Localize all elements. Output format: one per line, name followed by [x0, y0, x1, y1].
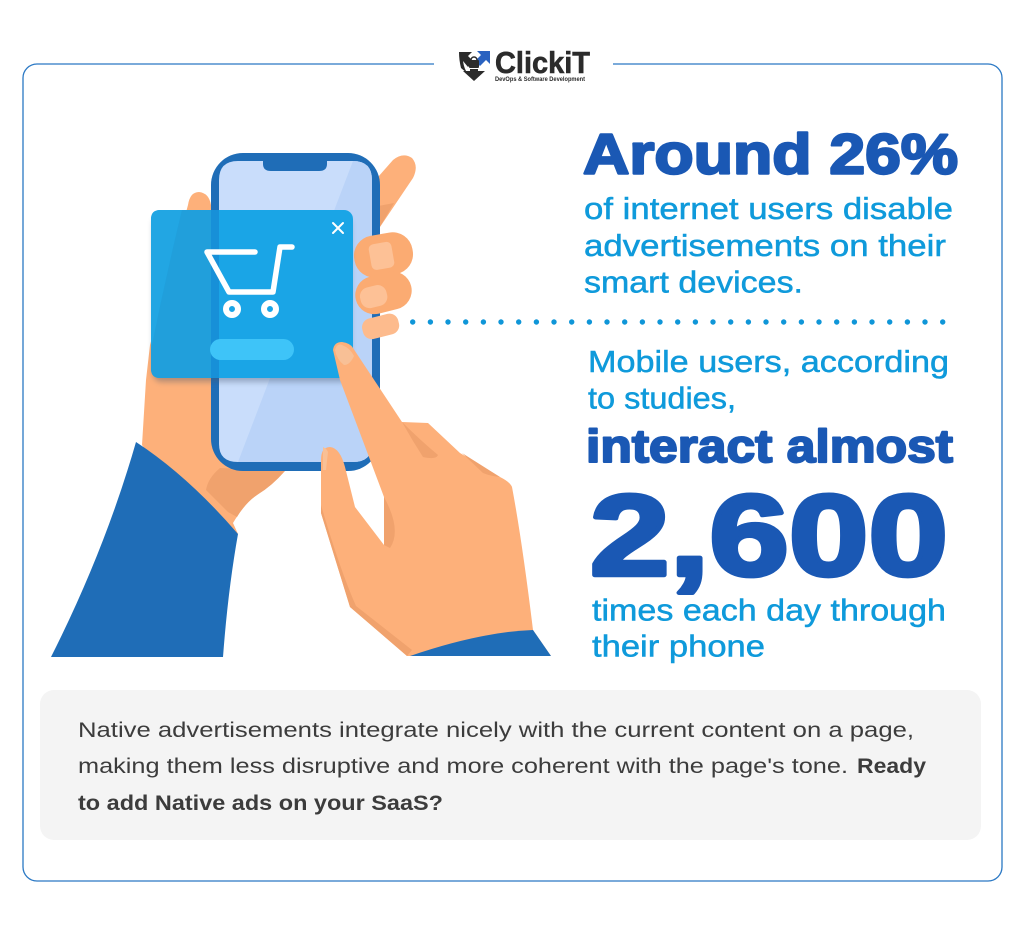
right sleeve: [410, 630, 551, 656]
text: times each day: times each day through: [592, 592, 946, 628]
text: internet users disable ads: of internet users disable: [584, 191, 953, 226]
text: times each day: [592, 592, 946, 664]
panel: native ads note: to add Native ads on your SaaS?: [78, 791, 443, 815]
panel: native ads note: making them less disruptive and more coherent with the page's tone.: [78, 754, 848, 778]
text: mobile users according to studies: [588, 344, 949, 416]
finger 1: [351, 229, 416, 281]
card button: [210, 339, 294, 360]
logo tagline: DevOps & Software Development: [495, 77, 585, 83]
phone: [211, 153, 380, 471]
ad card: [151, 210, 353, 382]
palm shadow: [206, 468, 285, 517]
left sleeve: [51, 442, 238, 657]
icon: shopping cart: [207, 247, 292, 315]
finger 3: [360, 312, 401, 341]
card background: [151, 210, 353, 378]
panel: native ads note: [40, 690, 981, 840]
panel: native ads note: Native advertisements integrate nicely with the current content on a page,: [78, 718, 914, 742]
phone notch: [263, 160, 327, 171]
fingernail: [335, 345, 354, 365]
icon: close: [333, 223, 343, 233]
text: internet users disable ads: smart devices.: [584, 264, 803, 300]
hand shadows: [402, 422, 438, 458]
heading: Around 26%: Around 26%: [583, 122, 958, 186]
logo wordmark: ClickiT: [495, 45, 590, 80]
big number: 2,600: 2,600: [590, 472, 948, 600]
right hand: [321, 342, 551, 656]
dotted divider: [410, 319, 945, 325]
thumb behind phone: [378, 155, 416, 230]
finger 2: [351, 268, 416, 318]
text: internet users disable ads: advertisements on their: [584, 228, 946, 263]
back hand palm and finger: [142, 192, 300, 534]
panel: native ads note: Ready: [857, 754, 926, 778]
text: times each day: their phone: [592, 628, 765, 664]
icon: shield logo: [459, 51, 490, 81]
phone body: [211, 153, 380, 471]
heading: interact almost: interact almost: [586, 420, 953, 472]
screen highlight band: [238, 161, 372, 462]
phone screen: [219, 161, 372, 462]
card shadow: [153, 216, 351, 382]
logo: [459, 45, 590, 83]
text: mobile users according to studies: Mobile users, according: [588, 344, 949, 379]
illustration: hands holding phone: [51, 153, 551, 657]
text: mobile users according to studies: to studies,: [588, 380, 736, 416]
text: internet users disable ads: [584, 191, 953, 300]
